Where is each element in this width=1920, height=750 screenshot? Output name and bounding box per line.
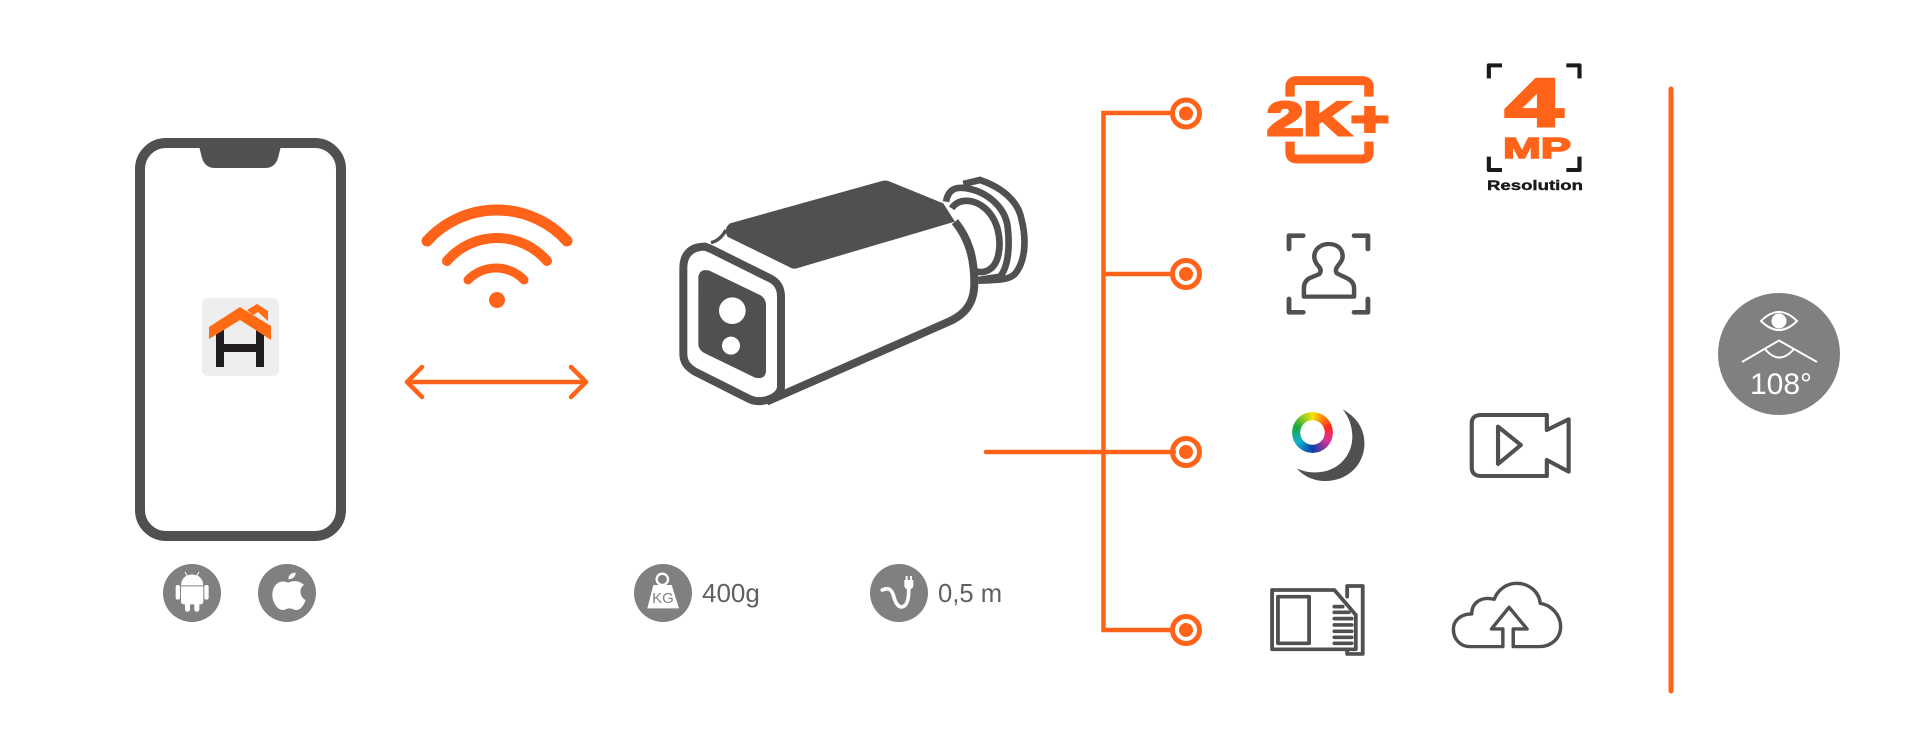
- illustration: camera: [683, 180, 1024, 402]
- icon: 2K+: [1267, 81, 1389, 159]
- node 2: [1172, 260, 1200, 288]
- icon: viewing angle 108 degrees: 108°: [1750, 368, 1812, 401]
- icon: face recognition: [1289, 236, 1368, 312]
- panel: smartphone: [140, 142, 341, 536]
- icon: 4MP resolution: MP: [1503, 133, 1571, 165]
- arrow: two-way connection: [407, 367, 586, 397]
- icon: app logo: [202, 298, 279, 376]
- icon: 2K+: 2K+: [1267, 92, 1389, 145]
- node 3: [1172, 438, 1200, 466]
- spec: weight: [634, 564, 760, 622]
- connector tree: [986, 100, 1200, 644]
- divider line: [1668, 89, 1674, 691]
- icon: apple: [258, 564, 316, 622]
- phone body outline: [140, 143, 341, 536]
- icon: colour night vision: [1292, 409, 1364, 481]
- phone notch: [198, 142, 282, 168]
- node 1: [1172, 100, 1200, 127]
- spec: cable length: [870, 564, 1002, 622]
- icon: wifi: [427, 210, 567, 308]
- icon: video: [1472, 415, 1569, 476]
- spec: weight: KG: [652, 590, 674, 607]
- icon: viewing angle 108 degrees: [1718, 293, 1840, 415]
- icon: SD card: [1272, 586, 1363, 654]
- icon: cloud upload: [1453, 583, 1561, 647]
- icon: 4MP resolution: 4: [1505, 65, 1563, 141]
- spec: cable length: 0,5 m: [938, 580, 1002, 608]
- node 4: [1172, 616, 1200, 644]
- icon: 4MP resolution: [1487, 65, 1583, 193]
- icon: 4MP resolution: Resolution: [1487, 177, 1583, 193]
- spec: weight: 400g: [702, 578, 760, 608]
- icon: android: [163, 564, 221, 622]
